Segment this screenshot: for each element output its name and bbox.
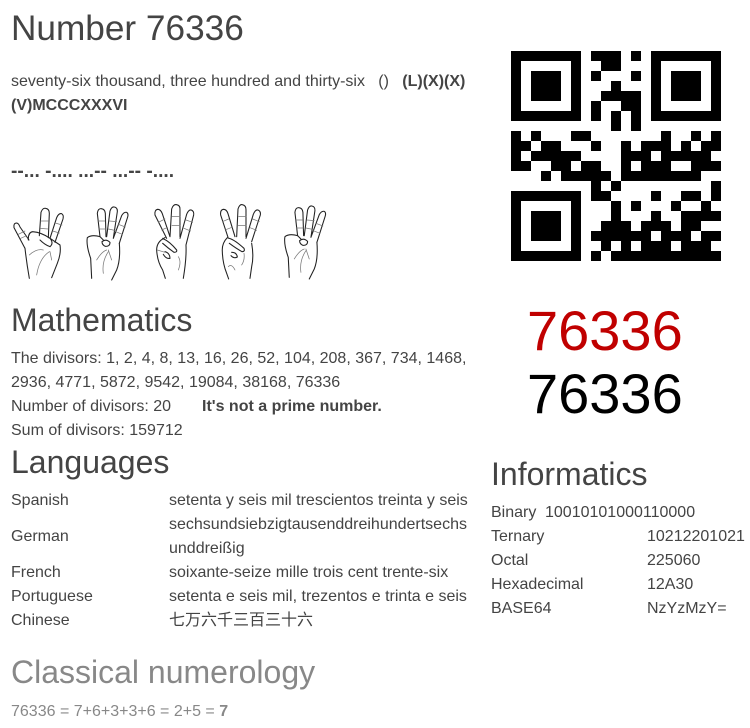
morse code: --... -.... ...-- ...-- -.... <box>11 161 174 182</box>
icon: hand digit 3 second <box>221 205 260 279</box>
heading: Classical numerology: Classical numerology <box>11 654 315 690</box>
text: divisors: Number of divisors: 20 <box>11 398 171 415</box>
table: informatics: 225060 <box>647 552 700 569</box>
table: informatics: 10212201021 <box>647 528 745 545</box>
heading: Mathematics: Mathematics <box>11 302 192 338</box>
table: informatics: Ternary <box>491 528 544 545</box>
text: divisors <box>11 350 466 439</box>
table: informatics: 12A30 <box>647 576 693 593</box>
text: divisors: Sum of divisors: 159712 <box>11 422 183 439</box>
heading: Languages: Languages <box>11 444 169 480</box>
number name and roman numeral: (V)MCCCXXXVI <box>11 97 127 114</box>
number name and roman numeral <box>11 73 465 114</box>
table: languages: Chinese <box>11 612 70 629</box>
table: informatics: 10010101000110000 <box>545 504 695 521</box>
table: languages: unddreißig <box>169 540 245 557</box>
table: languages <box>11 492 468 629</box>
number in black: 76336 <box>527 362 683 425</box>
table: languages: German <box>11 528 69 545</box>
icon: hand digit 6 second <box>285 206 326 279</box>
table: languages: French <box>11 564 61 581</box>
table: informatics: Octal <box>491 552 528 569</box>
icon: hand digit 7 <box>14 208 63 278</box>
text: numerology sum: 76336 = 7+6+3+3+6 = 2+5 = 7 <box>11 703 228 720</box>
number name and roman numeral: seventy-six thousand, three hundred and thirty-six () (L)(X)(X) <box>11 73 465 90</box>
icon: hand digit 3 <box>155 205 194 278</box>
text: divisors: It's not a prime number. <box>202 398 382 415</box>
table: informatics: NzYzMzY= <box>647 600 727 617</box>
text: divisors: The divisors: 1, 2, 4, 8, 13, 16, 26, 52, 104, 208, 367, 734, 1468, <box>11 350 466 367</box>
table: languages: 七万六千三百三十六 <box>169 612 313 629</box>
table: languages: Spanish <box>11 492 69 509</box>
table: languages: soixante-seize mille trois cent trente-six <box>169 564 448 581</box>
heading: Informatics: Informatics <box>491 456 647 492</box>
icon: hand digit 6 <box>87 207 128 280</box>
table: languages: setenta y seis mil trescientos treinta y seis <box>169 492 468 509</box>
text: divisors: 2936, 4771, 5872, 9542, 19084, 38168, 76336 <box>11 374 340 391</box>
title: Number 76336 <box>11 9 244 48</box>
table: informatics <box>491 504 745 617</box>
icon: sign language hands <box>13 204 326 280</box>
table: informatics: Hexadecimal <box>491 576 583 593</box>
number in red: 76336 <box>527 299 683 362</box>
QR code <box>511 51 721 261</box>
table: languages: sechsundsiebzigtausenddreihundertsechs <box>169 516 467 533</box>
table: languages: Portuguese <box>11 588 93 605</box>
table: informatics: Binary <box>491 504 536 521</box>
table: informatics: BASE64 <box>491 600 551 617</box>
table: languages: setenta e seis mil, trezentos e trinta e seis <box>169 588 467 605</box>
